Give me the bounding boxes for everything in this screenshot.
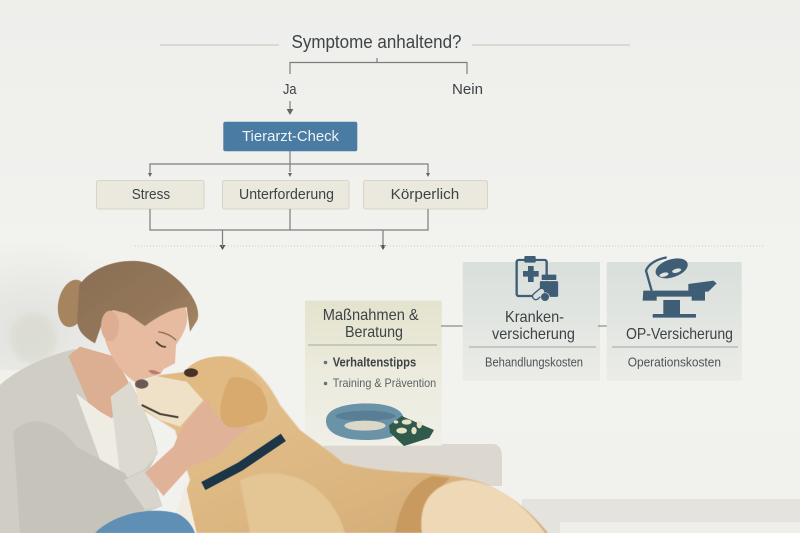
box: Körperlich (364, 180, 488, 209)
heading: Krankenversicherung: versicherung (492, 326, 575, 343)
connector: Krankenversicherung to OP-Versicherung (598, 325, 610, 327)
photo: woman (0, 313, 162, 533)
photo: woman's head (54, 261, 198, 382)
face (105, 307, 187, 382)
mouth (142, 405, 178, 417)
panel: OP-Versicherung (607, 255, 742, 381)
ear (101, 311, 119, 341)
heading: Maßnahmen & Beratung (323, 307, 419, 341)
sleeve shading (13, 421, 147, 533)
list: measures (324, 356, 436, 390)
lips (148, 370, 161, 374)
sofa and floor band (0, 370, 800, 533)
muzzle (136, 376, 203, 427)
panel: Maßnahmen & Beratung (305, 301, 442, 446)
ear (220, 377, 267, 427)
box: Körperlich: Körperlich (391, 187, 459, 203)
icon: operating table and lamp (643, 255, 717, 318)
heading: Krankenversicherung: Kranken- (505, 309, 564, 326)
box: Tierarzt-Check: Tierarzt-Check (242, 129, 340, 145)
list: measures: Verhaltenstipps (333, 356, 416, 370)
box: Tierarzt-Check (223, 122, 357, 151)
list: measures: Training & Prävention (333, 376, 436, 390)
cuff (124, 469, 162, 509)
photo: dog head (95, 356, 283, 533)
hair (77, 261, 198, 343)
eyebrow (158, 332, 176, 340)
connector: Tierarzt-Check to causes (148, 151, 430, 177)
label: Ja: Ja (283, 81, 297, 98)
heading: Maßnahmen & Beratung: Beratung (345, 324, 403, 341)
heading: Krankenversicherung (492, 309, 575, 343)
t-shirt (76, 393, 121, 480)
hair bun (54, 277, 92, 330)
box: Unterforderung: Unterforderung (239, 187, 334, 203)
text: Behandlungskosten: Behandlungskosten (485, 356, 583, 370)
collar (203, 437, 283, 486)
arrow: Ja to Tierarzt-Check (288, 101, 292, 114)
white chest (177, 483, 197, 533)
heading: Maßnahmen & Beratung: Maßnahmen & (323, 307, 419, 324)
title: Symptome anhaltend?: Symptome anhaltend? (292, 32, 462, 52)
panel: Krankenversicherung (463, 256, 600, 381)
photo: dog body (135, 357, 548, 533)
icon: clipboard with medicine (517, 256, 559, 301)
jeans (95, 511, 195, 533)
icon: puzzle toy (389, 416, 434, 446)
text: Operationskosten: Operationskosten (628, 356, 721, 370)
eye (156, 342, 166, 347)
eye (184, 368, 198, 377)
nose (135, 379, 148, 389)
box: Stress: Stress (132, 187, 170, 203)
icon: dog bed (326, 403, 404, 440)
head top (157, 356, 263, 423)
connector: Maßnahmen to Krankenversicherung (441, 325, 465, 327)
forearm and hand (145, 399, 249, 496)
neck and chest (68, 347, 128, 418)
box: Stress (96, 180, 204, 209)
box: Unterforderung (222, 180, 349, 209)
heading: OP-Versicherung: OP-Versicherung (626, 326, 733, 343)
label: Nein: Nein (452, 81, 483, 98)
decision bracket (290, 58, 467, 74)
connector: causes to outcomes (150, 209, 428, 250)
cardigan (0, 349, 162, 533)
cardigan inner panel (111, 382, 158, 481)
background plant (10, 313, 57, 363)
